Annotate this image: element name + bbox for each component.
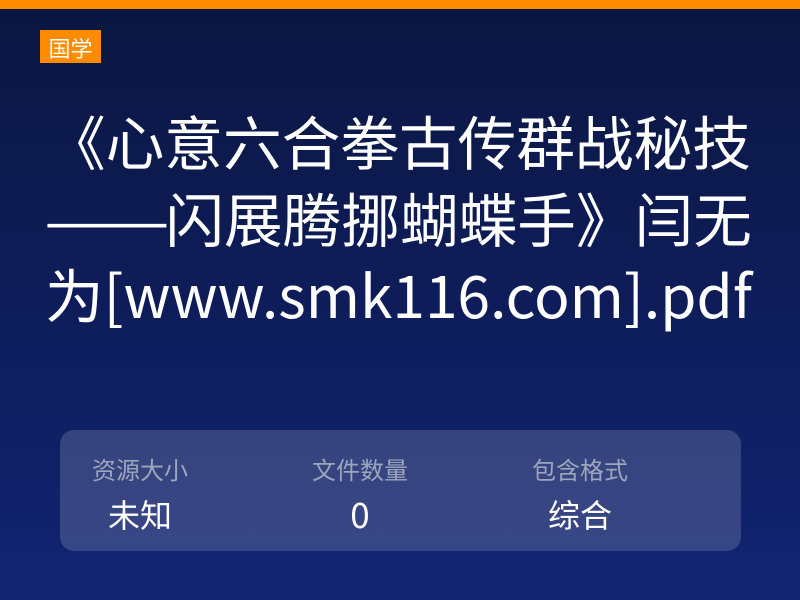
title xyxy=(44,97,754,335)
title: 闪展腾挪蝴蝶手》闫无 xyxy=(165,174,752,259)
stat: resource size: 资源大小 xyxy=(92,451,188,486)
stat: file count: 文件数量 xyxy=(312,451,408,486)
stat: resource size xyxy=(92,451,188,537)
title: 《心意六合拳古传群战秘技 xyxy=(47,97,751,182)
top accent bar xyxy=(0,0,800,9)
stat: formats: 包含格式 xyxy=(532,451,628,486)
stat: file count xyxy=(312,451,408,539)
stat: formats xyxy=(532,451,628,537)
category tag xyxy=(40,30,101,63)
category tag: 国学 xyxy=(48,32,92,64)
stat: file count: 0 xyxy=(350,488,370,539)
info panel xyxy=(60,430,741,551)
title: 为[www.smk116.com].pdf xyxy=(45,250,752,335)
title: —— xyxy=(44,174,170,259)
stat: resource size: 未知 xyxy=(108,491,172,537)
stat: formats: 综合 xyxy=(548,491,612,537)
